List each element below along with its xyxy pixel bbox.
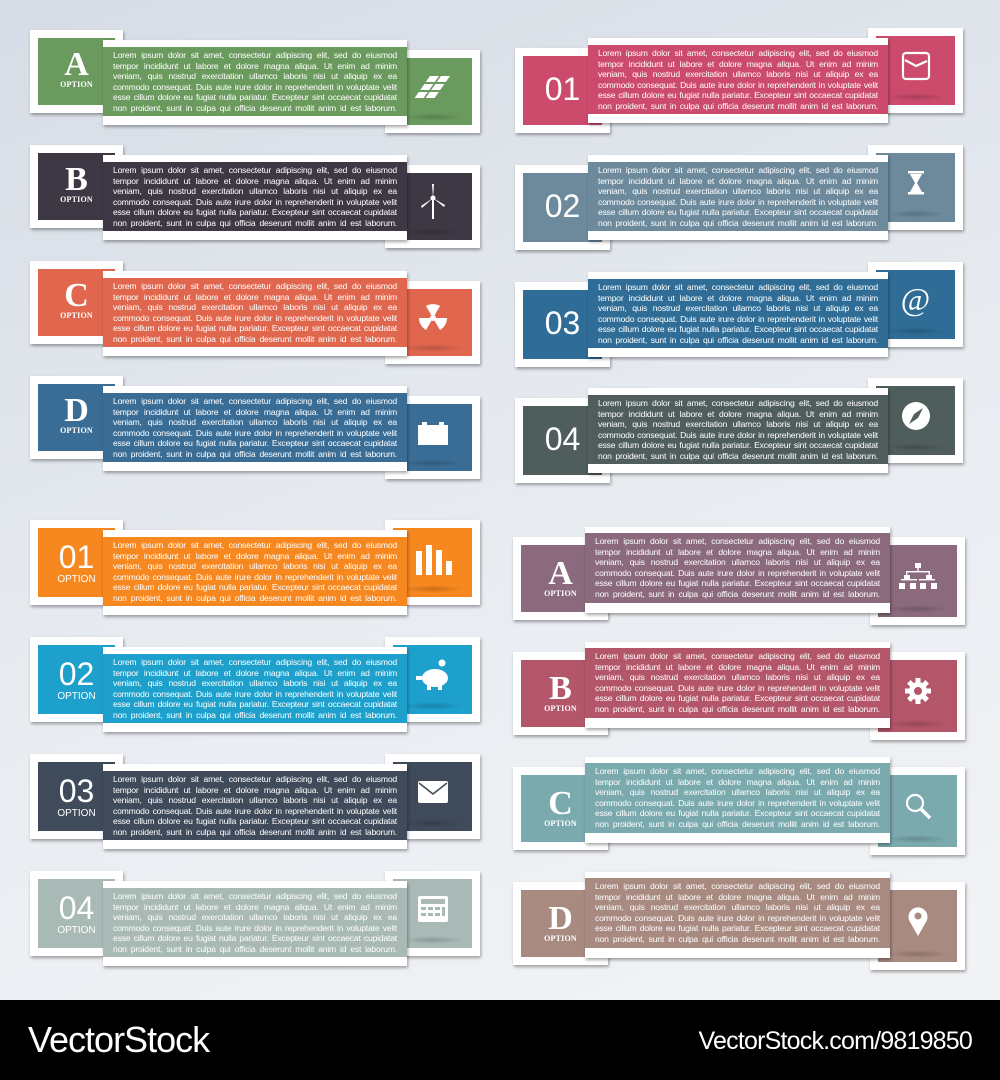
- text panel: non proident, sunt in culpa qui officia deserunt mollit anim id est laborum.: [595, 704, 880, 714]
- label frame 02: 02: [545, 188, 580, 224]
- text panel: Lorem ipsum dolor sit amet, consectetur adipiscing elit, sed do eiusmod: [595, 651, 880, 661]
- text panel: [103, 386, 407, 471]
- text panel: esse cillum dolore eu fugiat nulla pariatur. Excepteur sint occaecat cupidatat: [113, 933, 397, 943]
- text panel: tempor incididunt ut labore et dolore magna aliqua. Ut enim ad minim: [113, 551, 397, 561]
- label frame C: [513, 767, 608, 850]
- label frame 03: 03: [59, 773, 94, 809]
- icon frame: battery: [385, 396, 480, 479]
- text panel: tempor incididunt ut labore et dolore magna aliqua. Ut enim ad minim: [598, 293, 878, 303]
- text panel: non proident, sunt in culpa qui officia deserunt mollit anim id est laborum.: [598, 218, 878, 228]
- right item A: [512, 527, 968, 629]
- text panel: commodo consequat. Duis aute irure dolor in reprehenderit in voluptate velit: [598, 80, 878, 90]
- text panel: Lorem ipsum dolor sit amet, consectetur adipiscing elit, sed do eiusmod: [113, 165, 397, 175]
- left item C: [29, 261, 483, 368]
- text panel: veniam, quis nostrud exercitation ullamco laboris nisi ut aliquip ex ea: [113, 561, 397, 571]
- left item B: [29, 145, 483, 252]
- text panel: Lorem ipsum dolor sit amet, consectetur adipiscing elit, sed do eiusmod: [598, 398, 878, 408]
- label frame 04: [515, 398, 610, 483]
- right item C: [512, 757, 968, 859]
- text panel: commodo consequat. Duis aute irure dolor in reprehenderit in voluptate velit: [598, 314, 878, 324]
- label frame A: A: [64, 46, 89, 83]
- text panel: non proident, sunt in culpa qui officia deserunt mollit anim id est laborum.: [595, 819, 880, 829]
- icon frame: gear: [870, 652, 965, 740]
- label frame 01: 01: [545, 71, 580, 107]
- text panel: commodo consequat. Duis aute irure dolor in reprehenderit in voluptate velit: [598, 197, 878, 207]
- text panel: tempor incididunt ut labore et dolore magna aliqua. Ut enim ad minim: [595, 892, 880, 902]
- text panel: veniam, quis nostrud exercitation ullamco laboris nisi ut aliquip ex ea: [113, 912, 397, 922]
- label frame 01: OPTION: [57, 574, 96, 585]
- text panel: non proident, sunt in culpa qui officia deserunt mollit anim id est laborum.: [598, 451, 878, 461]
- text panel: non proident, sunt in culpa qui officia deserunt mollit anim id est laborum.: [113, 827, 397, 837]
- text panel: tempor incididunt ut labore et dolore magna aliqua. Ut enim ad minim: [598, 59, 878, 69]
- text panel: tempor incididunt ut labore et dolore magna aliqua. Ut enim ad minim: [598, 409, 878, 419]
- text panel: commodo consequat. Duis aute irure dolor in reprehenderit in voluptate velit: [595, 798, 880, 808]
- text panel: Lorem ipsum dolor sit amet, consectetur adipiscing elit, sed do eiusmod: [113, 891, 397, 901]
- icon frame: calculator: [385, 871, 480, 956]
- text panel: tempor incididunt ut labore et dolore magna aliqua. Ut enim ad minim: [598, 176, 878, 186]
- text panel: esse cillum dolore eu fugiat nulla pariatur. Excepteur sint occaecat cupidatat: [598, 90, 878, 100]
- icon frame: mail outline: [868, 28, 963, 113]
- text panel: Lorem ipsum dolor sit amet, consectetur adipiscing elit, sed do eiusmod: [598, 165, 878, 175]
- left item 03: [29, 754, 483, 853]
- label frame D: [30, 376, 123, 459]
- text panel: Lorem ipsum dolor sit amet, consectetur adipiscing elit, sed do eiusmod: [595, 881, 880, 891]
- icon frame: bar chart: [385, 520, 480, 605]
- label frame C: [30, 261, 123, 344]
- text panel: [103, 530, 407, 615]
- text panel: Lorem ipsum dolor sit amet, consectetur adipiscing elit, sed do eiusmod: [595, 766, 880, 776]
- text panel: commodo consequat. Duis aute irure dolor in reprehenderit in voluptate velit: [598, 430, 878, 440]
- text panel: veniam, quis nostrud exercitation ullamco laboris nisi ut aliquip ex ea: [113, 186, 397, 196]
- text panel: esse cillum dolore eu fugiat nulla pariatur. Excepteur sint occaecat cupidatat: [113, 582, 397, 592]
- text panel: tempor incididunt ut labore et dolore magna aliqua. Ut enim ad minim: [595, 547, 880, 557]
- right item D: [512, 872, 968, 974]
- label frame A: [513, 537, 608, 620]
- text panel: [585, 527, 890, 613]
- text panel: [588, 388, 888, 473]
- label frame 03: [515, 282, 610, 367]
- label frame B: [513, 652, 608, 735]
- text panel: commodo consequat. Duis aute irure dolor in reprehenderit in voluptate velit: [113, 197, 397, 207]
- text panel: [588, 155, 888, 240]
- icon frame: map pin: [870, 882, 965, 970]
- text panel: tempor incididunt ut labore et dolore magna aliqua. Ut enim ad minim: [595, 777, 880, 787]
- text panel: commodo consequat. Duis aute irure dolor in reprehenderit in voluptate velit: [113, 313, 397, 323]
- text panel: tempor incididunt ut labore et dolore magna aliqua. Ut enim ad minim: [113, 785, 397, 795]
- text panel: commodo consequat. Duis aute irure dolor in reprehenderit in voluptate velit: [113, 428, 397, 438]
- text panel: esse cillum dolore eu fugiat nulla pariatur. Excepteur sint occaecat cupidatat: [113, 699, 397, 709]
- text panel: esse cillum dolore eu fugiat nulla pariatur. Excepteur sint occaecat cupidatat: [113, 207, 397, 217]
- label frame 02: [515, 165, 610, 250]
- text panel: esse cillum dolore eu fugiat nulla pariatur. Excepteur sint occaecat cupidatat: [113, 816, 397, 826]
- label frame C: C: [64, 277, 89, 314]
- text panel: [585, 642, 890, 728]
- text panel: Lorem ipsum dolor sit amet, consectetur adipiscing elit, sed do eiusmod: [598, 48, 878, 58]
- label frame 04: 04: [545, 421, 580, 457]
- text panel: [585, 872, 890, 958]
- text panel: esse cillum dolore eu fugiat nulla pariatur. Excepteur sint occaecat cupidatat: [598, 440, 878, 450]
- label frame B: B: [65, 161, 88, 198]
- label frame D: OPTION: [544, 934, 577, 943]
- text panel: commodo consequat. Duis aute irure dolor in reprehenderit in voluptate velit: [113, 923, 397, 933]
- text panel: [103, 647, 407, 732]
- icon frame: wind turbine: [385, 165, 480, 248]
- label frame 01: [515, 48, 610, 133]
- label frame 04: [30, 871, 123, 956]
- text panel: non proident, sunt in culpa qui officia deserunt mollit anim id est laborum.: [113, 944, 397, 954]
- text panel: [103, 271, 407, 356]
- text panel: [103, 155, 407, 240]
- label frame 03: OPTION: [57, 808, 96, 819]
- right item 04: [514, 378, 966, 487]
- label frame 03: [30, 754, 123, 839]
- text panel: tempor incididunt ut labore et dolore magna aliqua. Ut enim ad minim: [113, 902, 397, 912]
- text panel: veniam, quis nostrud exercitation ullamco laboris nisi ut aliquip ex ea: [113, 302, 397, 312]
- text panel: commodo consequat. Duis aute irure dolor in reprehenderit in voluptate velit: [595, 568, 880, 578]
- label frame A: OPTION: [544, 589, 577, 598]
- text panel: commodo consequat. Duis aute irure dolor in reprehenderit in voluptate velit: [113, 82, 397, 92]
- right item B: [512, 642, 968, 744]
- text panel: non proident, sunt in culpa qui officia deserunt mollit anim id est laborum.: [598, 335, 878, 345]
- left item A: [29, 30, 483, 137]
- left item 04: [29, 871, 483, 970]
- label frame C: OPTION: [544, 819, 577, 828]
- label frame A: A: [548, 555, 573, 592]
- text panel: Lorem ipsum dolor sit amet, consectetur adipiscing elit, sed do eiusmod: [113, 396, 397, 406]
- text panel: tempor incididunt ut labore et dolore magna aliqua. Ut enim ad minim: [113, 668, 397, 678]
- text panel: esse cillum dolore eu fugiat nulla pariatur. Excepteur sint occaecat cupidatat: [598, 207, 878, 217]
- label frame B: OPTION: [60, 195, 93, 204]
- brand: VectorStock: [28, 1019, 209, 1060]
- text panel: commodo consequat. Duis aute irure dolor in reprehenderit in voluptate velit: [113, 572, 397, 582]
- text panel: tempor incididunt ut labore et dolore magna aliqua. Ut enim ad minim: [113, 176, 397, 186]
- label frame D: [513, 882, 608, 965]
- label frame 04: OPTION: [57, 925, 96, 936]
- text panel: tempor incididunt ut labore et dolore magna aliqua. Ut enim ad minim: [113, 61, 397, 71]
- icon frame: piggy bank: [385, 637, 480, 722]
- text panel: non proident, sunt in culpa qui officia deserunt mollit anim id est laborum.: [595, 934, 880, 944]
- icon frame: hourglass: [868, 145, 963, 230]
- text panel: tempor incididunt ut labore et dolore magna aliqua. Ut enim ad minim: [113, 407, 397, 417]
- right item 02: [514, 145, 966, 254]
- text panel: Lorem ipsum dolor sit amet, consectetur adipiscing elit, sed do eiusmod: [113, 774, 397, 784]
- label frame 02: [30, 637, 123, 722]
- icon frame: solar panel: [385, 50, 480, 133]
- text panel: veniam, quis nostrud exercitation ullamco laboris nisi ut aliquip ex ea: [113, 417, 397, 427]
- text panel: veniam, quis nostrud exercitation ullamco laboris nisi ut aliquip ex ea: [598, 186, 878, 196]
- icon frame: radiation: [385, 281, 480, 364]
- text panel: [103, 40, 407, 125]
- text panel: commodo consequat. Duis aute irure dolor in reprehenderit in voluptate velit: [113, 806, 397, 816]
- text panel: veniam, quis nostrud exercitation ullamco laboris nisi ut aliquip ex ea: [113, 71, 397, 81]
- text panel: esse cillum dolore eu fugiat nulla pariatur. Excepteur sint occaecat cupidatat: [113, 438, 397, 448]
- text panel: veniam, quis nostrud exercitation ullamco laboris nisi ut aliquip ex ea: [595, 557, 880, 567]
- text panel: non proident, sunt in culpa qui officia deserunt mollit anim id est laborum.: [113, 334, 397, 344]
- label frame A: OPTION: [60, 80, 93, 89]
- text panel: esse cillum dolore eu fugiat nulla pariatur. Excepteur sint occaecat cupidatat: [113, 323, 397, 333]
- label frame B: [30, 145, 123, 228]
- text panel: Lorem ipsum dolor sit amet, consectetur adipiscing elit, sed do eiusmod: [598, 282, 878, 292]
- text panel: Lorem ipsum dolor sit amet, consectetur adipiscing elit, sed do eiusmod: [113, 657, 397, 667]
- right item 03: [514, 262, 966, 371]
- left item 01: [29, 520, 483, 619]
- text panel: tempor incididunt ut labore et dolore magna aliqua. Ut enim ad minim: [595, 662, 880, 672]
- text panel: non proident, sunt in culpa qui officia deserunt mollit anim id est laborum.: [113, 103, 397, 113]
- icon frame: magnifier: [870, 767, 965, 855]
- label frame B: B: [549, 670, 572, 707]
- icon frame: compass: [868, 378, 963, 463]
- label frame D: D: [548, 900, 573, 937]
- icon frame: envelope: [385, 754, 480, 839]
- label frame 01: 01: [59, 539, 94, 575]
- text panel: esse cillum dolore eu fugiat nulla pariatur. Excepteur sint occaecat cupidatat: [595, 693, 880, 703]
- text panel: veniam, quis nostrud exercitation ullamco laboris nisi ut aliquip ex ea: [113, 678, 397, 688]
- left item 02: [29, 637, 483, 736]
- icon frame: at sign: @: [901, 280, 930, 316]
- text panel: veniam, quis nostrud exercitation ullamco laboris nisi ut aliquip ex ea: [595, 787, 880, 797]
- text panel: non proident, sunt in culpa qui officia deserunt mollit anim id est laborum.: [113, 593, 397, 603]
- text panel: Lorem ipsum dolor sit amet, consectetur adipiscing elit, sed do eiusmod: [113, 50, 397, 60]
- label frame B: OPTION: [544, 704, 577, 713]
- label frame D: D: [64, 392, 89, 429]
- label frame C: C: [548, 785, 573, 822]
- text panel: Lorem ipsum dolor sit amet, consectetur adipiscing elit, sed do eiusmod: [595, 536, 880, 546]
- right item 01: [514, 28, 966, 137]
- text panel: esse cillum dolore eu fugiat nulla pariatur. Excepteur sint occaecat cupidatat: [113, 92, 397, 102]
- text panel: non proident, sunt in culpa qui officia deserunt mollit anim id est laborum.: [595, 589, 880, 599]
- text panel: [588, 272, 888, 357]
- text panel: commodo consequat. Duis aute irure dolor in reprehenderit in voluptate velit: [113, 689, 397, 699]
- text panel: non proident, sunt in culpa qui officia deserunt mollit anim id est laborum.: [113, 218, 397, 228]
- text panel: Lorem ipsum dolor sit amet, consectetur adipiscing elit, sed do eiusmod: [113, 281, 397, 291]
- footer bar: [0, 1000, 1000, 1080]
- label frame 02: 02: [59, 656, 94, 692]
- label frame C: OPTION: [60, 311, 93, 320]
- text panel: [103, 764, 407, 849]
- icon frame: at sign: [868, 262, 963, 347]
- label frame 04: 04: [59, 890, 94, 926]
- text panel: veniam, quis nostrud exercitation ullamco laboris nisi ut aliquip ex ea: [595, 672, 880, 682]
- text panel: veniam, quis nostrud exercitation ullamco laboris nisi ut aliquip ex ea: [595, 902, 880, 912]
- text panel: [103, 881, 407, 966]
- label frame 02: OPTION: [57, 691, 96, 702]
- text panel: Lorem ipsum dolor sit amet, consectetur adipiscing elit, sed do eiusmod: [113, 540, 397, 550]
- text panel: [585, 757, 890, 843]
- text panel: esse cillum dolore eu fugiat nulla pariatur. Excepteur sint occaecat cupidatat: [595, 578, 880, 588]
- text panel: esse cillum dolore eu fugiat nulla pariatur. Excepteur sint occaecat cupidatat: [598, 324, 878, 334]
- text panel: non proident, sunt in culpa qui officia deserunt mollit anim id est laborum.: [113, 449, 397, 459]
- url: VectorStock.com/9819850: [699, 1027, 972, 1055]
- text panel: tempor incididunt ut labore et dolore magna aliqua. Ut enim ad minim: [113, 292, 397, 302]
- text panel: esse cillum dolore eu fugiat nulla pariatur. Excepteur sint occaecat cupidatat: [595, 808, 880, 818]
- text panel: non proident, sunt in culpa qui officia deserunt mollit anim id est laborum.: [113, 710, 397, 720]
- text panel: [588, 38, 888, 123]
- label frame A: [30, 30, 123, 113]
- text panel: commodo consequat. Duis aute irure dolor in reprehenderit in voluptate velit: [595, 683, 880, 693]
- text panel: veniam, quis nostrud exercitation ullamco laboris nisi ut aliquip ex ea: [598, 69, 878, 79]
- text panel: commodo consequat. Duis aute irure dolor in reprehenderit in voluptate velit: [595, 913, 880, 923]
- label frame D: OPTION: [60, 426, 93, 435]
- text panel: esse cillum dolore eu fugiat nulla pariatur. Excepteur sint occaecat cupidatat: [595, 923, 880, 933]
- text panel: veniam, quis nostrud exercitation ullamco laboris nisi ut aliquip ex ea: [113, 795, 397, 805]
- text panel: veniam, quis nostrud exercitation ullamco laboris nisi ut aliquip ex ea: [598, 419, 878, 429]
- label frame 01: [30, 520, 123, 605]
- text panel: non proident, sunt in culpa qui officia deserunt mollit anim id est laborum.: [598, 101, 878, 111]
- icon frame: org chart: [870, 537, 965, 625]
- left item D: [29, 376, 483, 483]
- text panel: veniam, quis nostrud exercitation ullamco laboris nisi ut aliquip ex ea: [598, 303, 878, 313]
- label frame 03: 03: [545, 305, 580, 341]
